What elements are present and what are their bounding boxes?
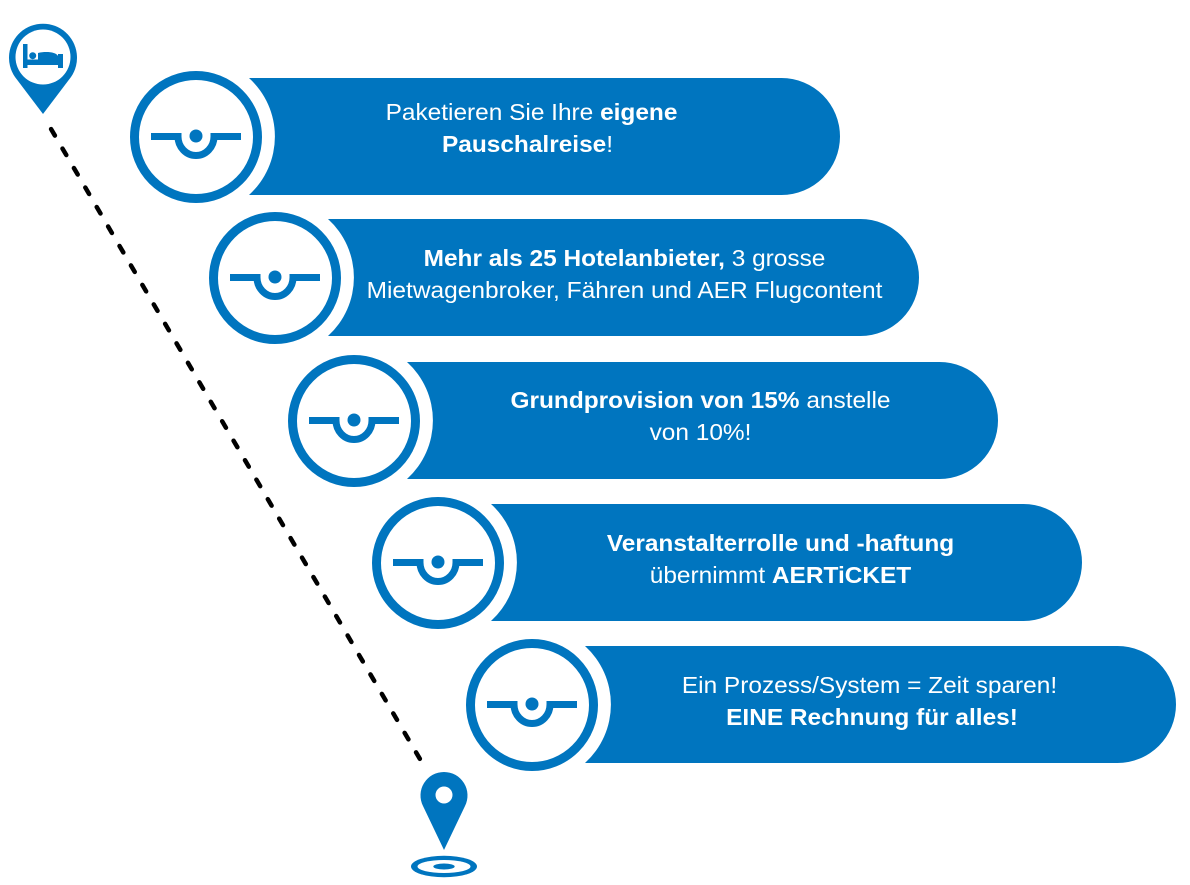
text: step 1 [386,101,677,158]
panel: step 2 [214,216,919,340]
panel: step 5 [470,644,1176,766]
icon: start pin with bed [9,24,77,114]
text: step 2 [367,247,883,304]
text: step 5: EINE Rechnung für alles! [726,706,1018,731]
text: step 4 [607,532,954,589]
icon: destination pin with target [411,772,477,877]
panel: step 4 [376,502,1082,624]
text: step 3 [511,389,890,446]
text: step 2: Mehr als 25 Hotelanbieter, 3 grosse [424,247,825,272]
text: step 5 [682,674,1057,731]
panel: step 1 [134,76,840,198]
text: step 4: Veranstalterrolle und -haftung [607,532,954,557]
text: step 5: Ein Prozess/System = Zeit sparen! [682,674,1057,699]
icon: bed [23,44,63,68]
dashed route line [51,129,420,759]
panel: step 3 [292,360,998,482]
text: step 2: Mietwagenbroker, Fähren und AER Flugcontent [367,278,883,304]
text: step 4: übernimmt AERTiCKET [650,564,912,589]
text: step 3: von 10%! [650,421,751,446]
text: step 3: Grundprovision von 15% anstelle [511,389,890,414]
text: step 1: Paketieren Sie Ihre eigene [386,101,677,126]
text: step 1: Pauschalreise! [442,133,613,158]
